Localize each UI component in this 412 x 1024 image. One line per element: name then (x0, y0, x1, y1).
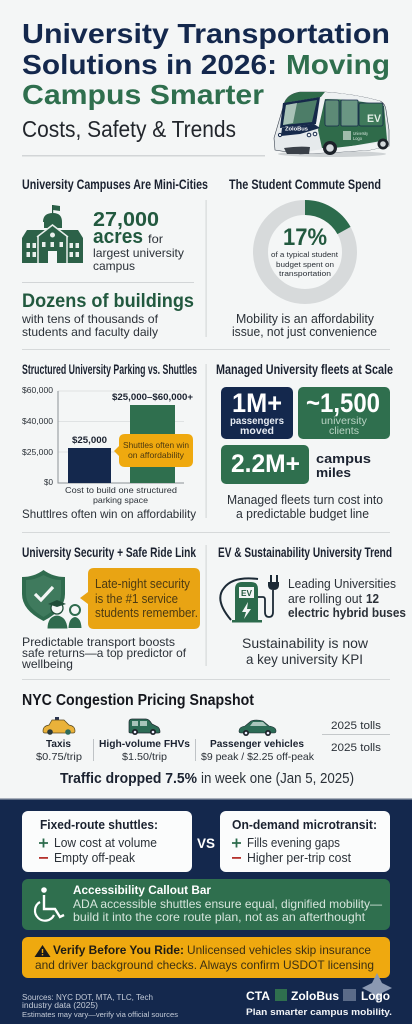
caption (232, 312, 377, 339)
stat: traffic dropped: Traffic dropped 7.5% (60, 771, 197, 787)
panel: university campuses are mini-cities (21, 176, 208, 339)
call to action and logos: Logo (361, 989, 390, 1003)
caption (242, 635, 369, 667)
stat: traffic dropped (60, 771, 354, 787)
stat: 27,000 acres: for (148, 232, 163, 246)
panel: student commute spend (229, 176, 381, 339)
caption: safe returns—a top predictor of (22, 646, 187, 660)
call to action and logos (246, 973, 392, 1018)
text: electric hybrid buses: are rolling out (288, 592, 363, 606)
card: fixed-route shuttles: Low cost at volume (54, 836, 157, 850)
callout: late-night security: students remember. (95, 605, 198, 620)
label: 2025 tolls (322, 720, 390, 754)
caption: Predictable transport boosts (22, 635, 175, 649)
icon: electric campus shuttle bus: Logo (353, 136, 363, 141)
stat: 27,000 acres: campus (93, 259, 135, 273)
tolls: high-volume FHVs: High-volume FHVs (99, 738, 190, 750)
tolls: passenger vehicles: $9 peak / $2.25 off-peak (201, 751, 315, 763)
bar chart: $0 (44, 477, 53, 487)
bar chart: Cost to build one structured (65, 485, 177, 495)
stat card: 1M+ passengers: moved (240, 425, 274, 437)
stat card: 1M+ passengers: passengers (230, 415, 284, 427)
text: electric hybrid buses: electric hybrid buses (288, 606, 406, 620)
icon: warning triangle (34, 945, 50, 957)
callout: accessibility (22, 879, 390, 930)
stat: 27,000 acres: largest university (93, 246, 184, 260)
stat card: 2.2M+ campus miles (221, 445, 371, 484)
icon: shield with students (22, 570, 82, 629)
bar chart: $25,000–$60,000+ (112, 392, 193, 403)
icon: electric campus shuttle bus: ZoloBus (285, 126, 308, 132)
callout: accessibility: build it into the core route plan, not as an afterthought (73, 910, 366, 924)
card: on-demand microtransit: Fills evening gaps (247, 836, 340, 850)
stat card: 2.2M+ campus miles: 2.2M+ (231, 450, 300, 478)
caption: Shuttlres often win on affordability (22, 507, 196, 521)
text: electric hybrid buses: 12 (366, 592, 379, 606)
card: fixed-route shuttles: Fixed-route shuttles: (40, 818, 158, 832)
subtitle: Costs, Safety & Trends (22, 116, 236, 142)
icon: EV charger: EV (241, 589, 253, 598)
card: on-demand microtransit: On-demand microtransit: (232, 818, 377, 832)
caption (227, 493, 383, 521)
caption: Mobility is an affordability (236, 312, 375, 326)
tolls: taxis: Taxis (46, 738, 71, 750)
title: Moving (286, 49, 390, 80)
call to action and logos: Plan smarter campus mobility. (246, 1007, 392, 1018)
card: fixed-route shuttles: Empty off-peak (54, 851, 136, 865)
icon: passenger car (239, 720, 276, 736)
bar chart: parking space (93, 495, 148, 505)
title: Campus Smarter (22, 79, 264, 110)
stat: dozens of buildings: Dozens of buildings (22, 291, 194, 312)
stat: dozens of buildings (21, 291, 194, 339)
callout: shuttles often win: Shuttles often win (123, 440, 189, 450)
text: electric hybrid buses (288, 577, 406, 620)
callout: verify before you ride: and driver background checks. Always confirm USDOT licensing (35, 958, 374, 972)
stat card: 2.2M+ campus miles: campus (316, 451, 371, 466)
stat: dozens of buildings: students and faculty daily (22, 325, 158, 339)
stat card: 1,500 clients (298, 387, 390, 439)
bar chart: $40,000 (22, 416, 53, 426)
sources: Estimates may vary—verify via official sources (22, 1010, 178, 1019)
donut chart: 17%: budget spent on (276, 260, 334, 269)
title: Solutions in 2026: (22, 49, 277, 80)
stat card: 1,500 clients: clients (329, 425, 359, 437)
tolls: high-volume FHVs (99, 738, 190, 763)
callout: shuttles often win: on affordability (128, 450, 185, 460)
icon: electric campus shuttle bus: EV (367, 113, 382, 125)
title (22, 18, 390, 110)
bar chart: $25,000 (72, 435, 107, 446)
caption (21, 635, 187, 671)
icon: EV charger (220, 575, 279, 622)
caption: a predictable budget line (236, 507, 369, 521)
stat: traffic dropped: in week one (Jan 5, 2025) (201, 771, 354, 787)
stat: dozens of buildings: with tens of thousands of (21, 312, 159, 326)
call to action and logos: CTA (246, 989, 270, 1003)
donut chart: 17%: 17% (283, 224, 327, 251)
callout: verify before you ride (22, 937, 390, 978)
label: versus: VS (197, 836, 215, 851)
caption: a key university KPI (246, 651, 363, 667)
caption: Sustainability is now (242, 635, 369, 651)
callout: verify before you ride: Unlicensed vehicles skip insurance (187, 943, 371, 957)
callout: late-night security (80, 568, 200, 629)
heading: NYC Congestion Pricing Snapshot (22, 692, 255, 709)
donut chart: 17% (260, 207, 350, 296)
panel: NYC congestion pricing (22, 692, 390, 787)
stat card: 1M+ passengers: 1M+ (232, 388, 282, 418)
panel: EV and sustainability (218, 544, 406, 667)
card: fixed-route shuttles (22, 811, 192, 872)
caption: Managed fleets turn cost into (227, 493, 383, 507)
stat card: 2.2M+ campus miles: miles (316, 465, 351, 480)
heading: Structured University Parking vs. Shuttles (22, 361, 197, 377)
icon: electric campus shuttle bus: University (353, 131, 369, 136)
stat card: 1,500 clients: university (321, 415, 368, 427)
tolls: passenger vehicles: Passenger vehicles (210, 738, 304, 750)
panel: parking vs shuttles (22, 361, 197, 521)
icon: campus building (22, 205, 83, 263)
caption: issue, not just convenience (232, 325, 377, 339)
label: 2025 tolls: 2025 tolls (331, 720, 382, 732)
stat: 27,000 acres: acres (93, 226, 143, 248)
sources: Sources: NYC DOT, MTA, TLC, Tech (22, 993, 153, 1002)
donut chart: 17%: of a typical student (271, 250, 339, 259)
donut chart: 17%: transportation (279, 269, 331, 278)
panel: security and safe ride (21, 544, 200, 671)
bar chart: $60,000 (22, 385, 53, 395)
panel: dark footer (0, 798, 412, 1024)
panel: managed university fleets (216, 361, 393, 521)
bar chart: $25,000 (22, 447, 53, 457)
tolls: passenger vehicles (201, 738, 315, 763)
callout: accessibility: Accessibility Callout Bar (73, 883, 211, 897)
tolls: taxis (36, 738, 82, 763)
card: on-demand microtransit: Higher per-trip cost (247, 851, 352, 865)
callout: accessibility: ADA accessible shuttles ensure equal, dignified mobility— (73, 897, 382, 911)
icon: taxi (43, 717, 75, 735)
icon: electric campus shuttle bus (274, 92, 389, 157)
sources (22, 993, 178, 1019)
callout: verify before you ride: Verify Before You Ride: (53, 943, 184, 957)
callout: late-night security: is the #1 service (95, 591, 178, 606)
callout: shuttles often win (114, 434, 193, 467)
icon: high-volume FHV (129, 719, 160, 735)
heading: University Security + Safe Ride Link (22, 544, 196, 560)
stat card: 1M+ passengers (221, 387, 293, 439)
tolls: high-volume FHVs: $1.50/trip (122, 751, 167, 763)
caption: wellbeing (21, 657, 73, 671)
call to action and logos: ZoloBus (291, 989, 339, 1003)
card: on-demand microtransit (220, 811, 390, 872)
icon: wheelchair (35, 887, 64, 921)
bar chart (22, 385, 193, 505)
stat card: 1,500 clients: ~1,500 (306, 388, 380, 418)
heading: University Campuses Are Mini-Cities (22, 176, 208, 192)
title: University Transportation (22, 18, 390, 49)
text: electric hybrid buses: Leading Universities (288, 577, 396, 591)
stat: 27,000 acres (93, 209, 184, 273)
callout: late-night security: Late-night security (95, 576, 190, 591)
label: 2025 tolls: 2025 tolls (331, 742, 382, 754)
sources: industry data (2025) (22, 1001, 98, 1010)
stat: 27,000 acres: 27,000 (93, 209, 159, 231)
tolls: taxis: $0.75/trip (36, 751, 82, 763)
